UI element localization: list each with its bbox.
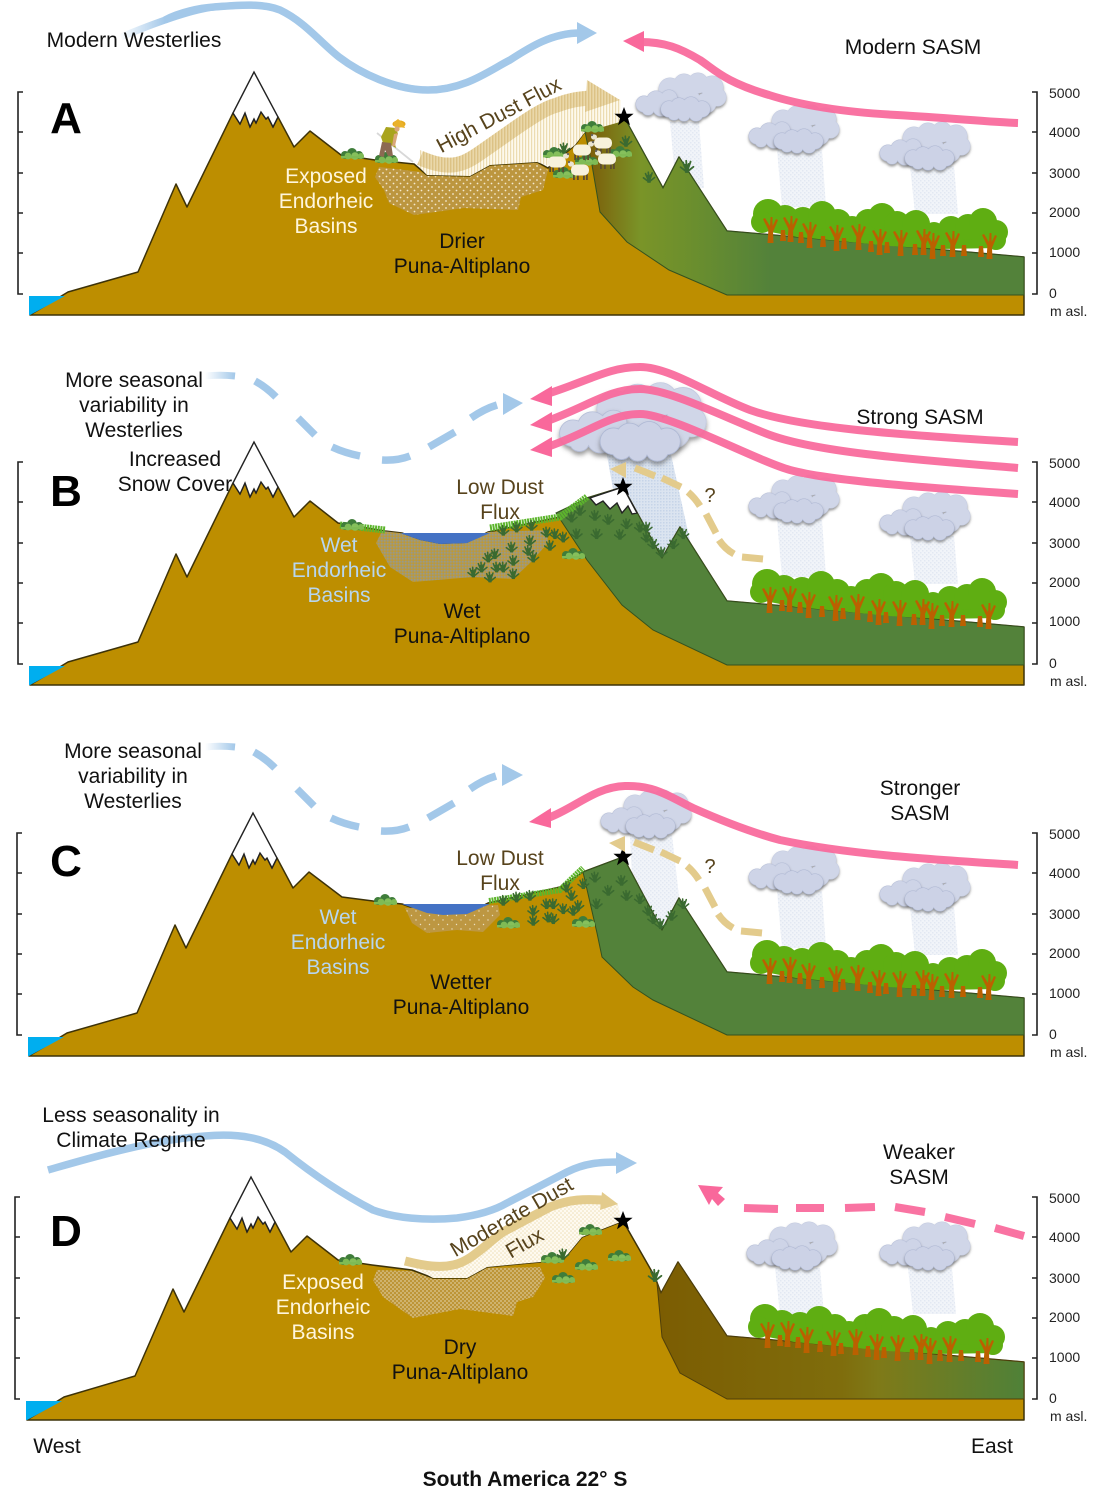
elevation axes C: 0 xyxy=(1049,1026,1057,1042)
elevation axes A: 2000 xyxy=(1049,204,1080,220)
question mark C: ? xyxy=(704,856,716,878)
stronger SASM arrow xyxy=(529,786,1018,865)
label: stronger SASM: Stronger xyxy=(880,777,960,800)
basin label D xyxy=(276,1271,370,1344)
dry eastern slope D xyxy=(657,1262,1024,1399)
location star B xyxy=(613,477,633,495)
region label A xyxy=(394,230,530,278)
elevation axes C: 1000 xyxy=(1049,985,1080,1001)
panel letter B: B xyxy=(50,467,82,516)
basin label C: Endorheic xyxy=(291,931,385,954)
dust flux label D: Moderate Dust xyxy=(446,1173,577,1262)
elevation axes D: 1000 xyxy=(1049,1349,1080,1365)
elevation axes A: 4000 xyxy=(1049,124,1080,140)
basin label B: Wet xyxy=(321,534,358,557)
basin label B: Endorheic xyxy=(292,559,386,582)
clouds D xyxy=(747,1222,970,1270)
panel letter A: A xyxy=(50,94,82,143)
label: modern SASM: Modern SASM xyxy=(845,36,981,59)
elevation axes B: 4000 xyxy=(1049,494,1080,510)
elevation axes B: 0 xyxy=(1049,655,1057,671)
elevation axes D: 0 xyxy=(1049,1390,1057,1406)
label: low dust flux B xyxy=(456,476,544,524)
label: less seasonality: Climate Regime xyxy=(56,1129,206,1152)
label: snow cover xyxy=(118,448,232,496)
basin label D: Endorheic xyxy=(276,1296,370,1319)
shrubs B xyxy=(341,519,585,560)
label: low dust flux C: Flux xyxy=(480,872,520,895)
panel D: weaker SASM xyxy=(15,1104,1087,1424)
elevation axes C xyxy=(17,826,1087,1060)
elevation axes D xyxy=(15,1190,1087,1424)
elevation axes B xyxy=(18,455,1087,689)
dust flux label A: High Dust Flux xyxy=(433,73,566,158)
elevation axes C: 3000 xyxy=(1049,906,1080,922)
question mark B: ? xyxy=(704,485,716,507)
basin label D: Basins xyxy=(291,1321,355,1344)
shrubs C xyxy=(374,894,595,929)
ocean B xyxy=(29,666,65,685)
rain columns D xyxy=(775,1268,956,1314)
elevation axes A xyxy=(18,85,1087,319)
panel letter D: D xyxy=(50,1207,82,1256)
grass strip C xyxy=(489,868,583,901)
transect caption: South America 22° S xyxy=(423,1468,627,1491)
region label D xyxy=(392,1336,528,1384)
label: westerlies variability C xyxy=(64,740,202,813)
label: less seasonality xyxy=(42,1104,220,1152)
basin label B xyxy=(292,534,386,607)
label: low dust flux C xyxy=(456,847,544,895)
label: westerlies variability C: Westerlies xyxy=(84,790,182,813)
label: low dust flux C: Low Dust xyxy=(456,847,544,870)
basin label B: Basins xyxy=(307,584,371,607)
modern westerlies arrow xyxy=(121,5,597,90)
shrubs and tufts D xyxy=(339,1224,661,1284)
icon: farmer with hoe xyxy=(377,119,413,162)
clouds C xyxy=(601,790,970,911)
basin label A: Basins xyxy=(294,215,358,238)
label: low dust flux B: Flux xyxy=(480,501,520,524)
elevation axes B: 2000 xyxy=(1049,574,1080,590)
forested slope B xyxy=(556,487,1024,665)
snow cap D xyxy=(230,1177,275,1232)
strong SASM arrows xyxy=(530,367,1018,494)
region label C: Puna-Altiplano xyxy=(393,996,529,1019)
label: snow cover: Snow Cover xyxy=(118,473,232,496)
location star A xyxy=(614,107,634,125)
weaker SASM dashed arrow xyxy=(698,1185,1024,1236)
lake C xyxy=(402,904,490,915)
elevation axes D: 5000 xyxy=(1049,1190,1080,1206)
wet basin B xyxy=(376,530,548,582)
ocean D xyxy=(26,1401,62,1420)
label: weaker SASM: Weaker xyxy=(883,1141,955,1164)
basin label A: Exposed xyxy=(285,165,367,188)
vegetated slope A xyxy=(585,117,1024,295)
elevation axes D: m asl. xyxy=(1050,1408,1087,1424)
land profile D xyxy=(27,1217,1024,1420)
clouds A xyxy=(636,73,970,170)
label: weaker SASM xyxy=(883,1141,955,1189)
label: westerlies variability C: More seasonal xyxy=(64,740,202,763)
region label C xyxy=(393,971,529,1019)
seasonal westerlies dashed arrow xyxy=(205,375,523,460)
dust dashed arrow B xyxy=(610,462,763,559)
basin label A: Endorheic xyxy=(279,190,373,213)
elevation axes C: 2000 xyxy=(1049,945,1080,961)
forest D xyxy=(748,1304,1005,1364)
basin label C: Wet xyxy=(320,906,357,929)
elevation axes A: 3000 xyxy=(1049,165,1080,181)
rain columns C xyxy=(630,835,958,955)
label: weaker SASM: SASM xyxy=(889,1166,949,1189)
panel B: strong SASM xyxy=(18,367,1087,689)
region label D: Puna-Altiplano xyxy=(392,1361,528,1384)
icon: sheep flock xyxy=(548,134,616,180)
elevation axes B: 1000 xyxy=(1049,613,1080,629)
region label D: Dry xyxy=(444,1336,477,1359)
grass tufts B xyxy=(468,506,689,582)
grass strips B xyxy=(340,497,587,530)
label: snow cover: Increased xyxy=(129,448,221,471)
lake B xyxy=(400,533,490,544)
panel C: stronger SASM xyxy=(17,740,1087,1060)
basin label C: Basins xyxy=(306,956,370,979)
elevation axes B: m asl. xyxy=(1050,673,1087,689)
rain columns A xyxy=(670,122,958,214)
label: westerlies variability B xyxy=(65,369,203,442)
shrubs and tufts A xyxy=(341,121,693,182)
grass tufts C xyxy=(498,872,689,928)
snow cap C xyxy=(232,813,277,868)
elevation axes B: 3000 xyxy=(1049,535,1080,551)
label: less seasonality: Less seasonality in xyxy=(42,1104,220,1127)
high dust flux arrow xyxy=(420,80,621,176)
title: modern westerlies: Modern Westerlies xyxy=(47,29,221,52)
region label A: Drier xyxy=(439,230,485,253)
label: westerlies variability B: More seasonal xyxy=(65,369,203,392)
dust flux label D: Flux xyxy=(502,1223,548,1263)
label: westerlies variability C: variability in xyxy=(78,765,188,788)
snow cap B xyxy=(233,442,278,497)
clouds B xyxy=(560,383,970,540)
panel letter C: C xyxy=(50,837,82,886)
westerlies arrow D xyxy=(48,1135,637,1219)
label: stronger SASM xyxy=(880,777,960,825)
region label A: Puna-Altiplano xyxy=(394,255,530,278)
ocean A xyxy=(29,296,65,315)
elevation axes B: 5000 xyxy=(1049,455,1080,471)
moderate dust flux arrow xyxy=(405,1192,623,1278)
rain columns B xyxy=(606,450,958,584)
label: westerlies variability B: variability in xyxy=(79,394,189,417)
elevation axes D: 2000 xyxy=(1049,1309,1080,1325)
region label B xyxy=(394,600,530,648)
seasonal westerlies dashed arrow C xyxy=(205,746,523,831)
forest B xyxy=(750,569,1007,629)
location star D xyxy=(613,1211,633,1229)
region label C: Wetter xyxy=(430,971,492,994)
forest A xyxy=(751,199,1008,259)
elevation axes C: 4000 xyxy=(1049,865,1080,881)
elevation axes A: 0 xyxy=(1049,285,1057,301)
label: low dust flux B: Low Dust xyxy=(456,476,544,499)
region label B: Wet xyxy=(444,600,481,623)
elevation axes D: 4000 xyxy=(1049,1229,1080,1245)
snow cap A xyxy=(233,72,278,127)
location star C xyxy=(613,847,633,865)
label: west: West xyxy=(33,1435,81,1458)
elevation axes D: 3000 xyxy=(1049,1270,1080,1286)
elevation axes A: m asl. xyxy=(1050,303,1087,319)
land profile B xyxy=(30,482,1024,685)
exposed basin A xyxy=(375,163,548,215)
exposed basin D xyxy=(373,1267,545,1318)
region label B: Puna-Altiplano xyxy=(394,625,530,648)
basin label A xyxy=(279,165,373,238)
basin label D: Exposed xyxy=(282,1271,364,1294)
label: stronger SASM: SASM xyxy=(890,802,950,825)
land profile A xyxy=(30,112,1024,315)
summit snow B xyxy=(590,487,637,514)
basin label C xyxy=(291,906,385,979)
modern SASM arrow xyxy=(623,31,1018,123)
elevation axes A: 1000 xyxy=(1049,244,1080,260)
elevation axes C: 5000 xyxy=(1049,826,1080,842)
forest C xyxy=(750,940,1007,1000)
label: westerlies variability B: Westerlies xyxy=(85,419,183,442)
elevation axes A: 5000 xyxy=(1049,85,1080,101)
basin C xyxy=(405,905,500,933)
elevation axes C: m asl. xyxy=(1050,1044,1087,1060)
ocean C xyxy=(28,1037,64,1056)
land profile C xyxy=(29,853,1024,1056)
dust dashed arrow C xyxy=(609,836,762,933)
label: east: East xyxy=(971,1435,1013,1458)
forested slope C xyxy=(583,857,1024,1035)
panel A: modern climate xyxy=(18,5,1087,319)
label: strong SASM: Strong SASM xyxy=(856,406,984,429)
